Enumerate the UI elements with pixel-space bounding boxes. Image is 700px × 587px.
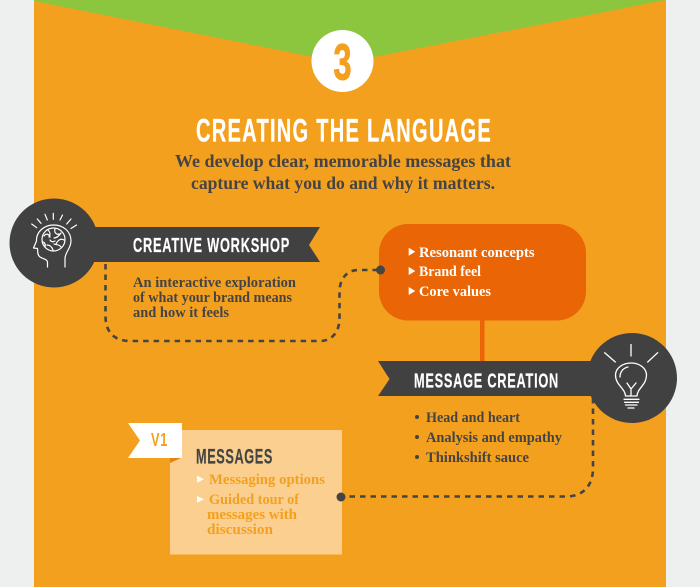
creation bullet list: Analysis and empathy [426,430,562,446]
connector: concepts to message creation [480,320,484,362]
banner: message creation [378,361,605,396]
panel: concepts: Core values [419,284,491,300]
panel: concepts [376,224,586,320]
creation bullet list [415,410,562,466]
creation bullet list: Thinkshift sauce [426,450,529,466]
subtitle [175,151,511,193]
panel: messages: MESSAGES [196,446,273,468]
green chevron [34,0,666,63]
panel: concepts: Resonant concepts [419,245,535,261]
version flag [128,423,182,463]
banner: creative workshop [88,227,320,262]
panel: messages [170,430,346,554]
title: CREATING THE LANGUAGE [196,112,492,148]
creation bullet list: Head and heart [426,410,520,426]
workshop description [133,275,297,321]
panel: messages: Messaging options [209,472,325,488]
workshop description: of what your brand means [133,290,292,306]
dashed connector: creation to messages [346,398,593,496]
banner: creative workshop: CREATIVE WORKSHOP [133,234,290,257]
panel: messages: discussion [207,522,274,538]
version flag: V1 [151,430,168,450]
subtitle: capture what you do and why it matters. [191,173,495,193]
banner: message creation: MESSAGE CREATION [414,370,559,392]
icon: head with brain [10,198,98,288]
panel: concepts: Brand feel [419,264,481,280]
step number badge [312,30,374,92]
dashed connector: workshop to concepts [106,264,378,341]
panel: messages: Guided tour of [209,492,300,508]
workshop description: and how it feels [133,305,229,321]
icon: light bulb [587,333,677,423]
subtitle: We develop clear, memorable messages that [175,151,511,171]
panel: messages: messages with [207,507,298,523]
workshop description: An interactive exploration [133,275,297,291]
step number badge: 3 [334,34,352,90]
